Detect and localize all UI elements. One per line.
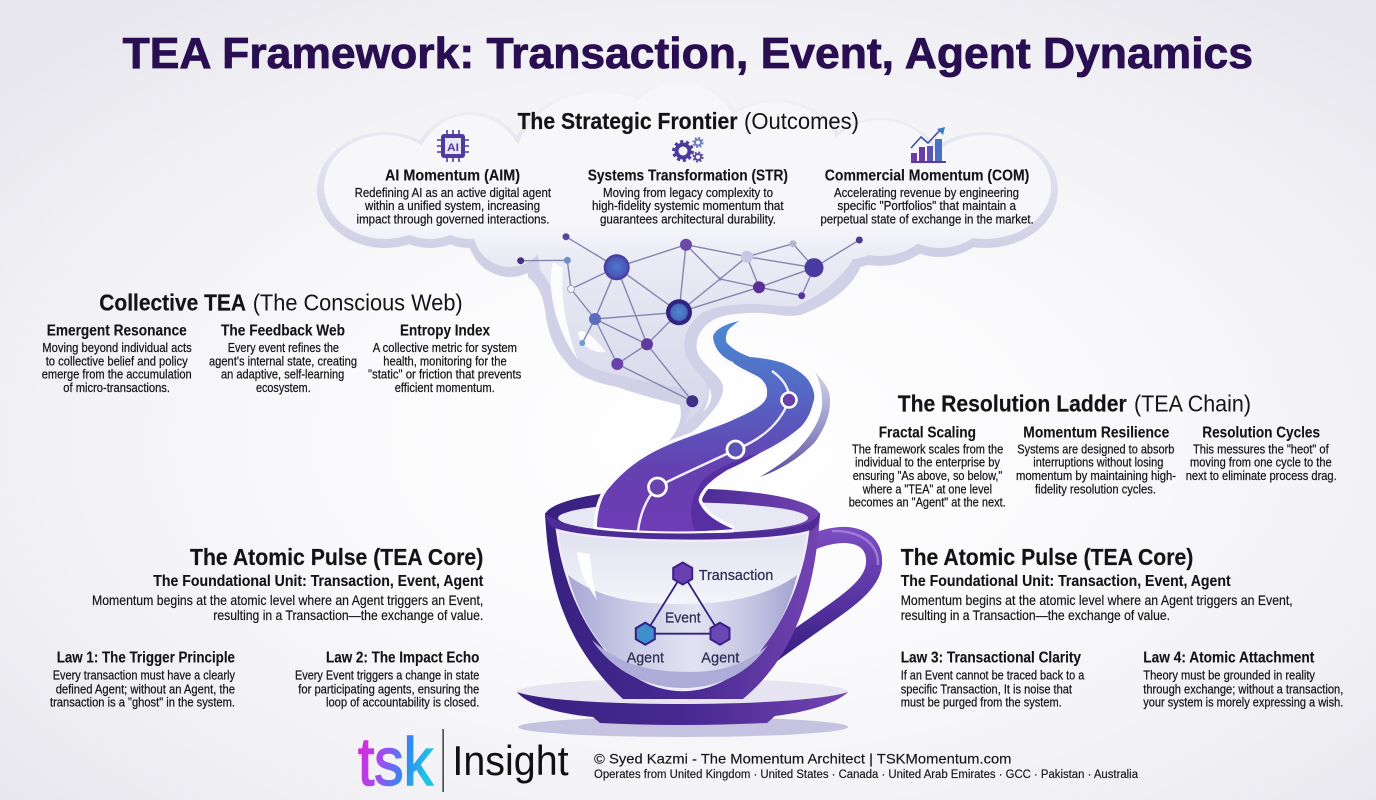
column: emergent resonance: of micro-transactions. <box>63 380 170 395</box>
law 4: your system is morely expressing a wish. <box>1143 695 1343 710</box>
column: feedback web: The Feedback Web <box>221 323 345 340</box>
text: momentum right: resulting in a Transaction—the exchange of value. <box>901 607 1170 623</box>
footer <box>358 724 1139 800</box>
column: AI Momentum: Redefining AI as an active digital agent <box>355 185 551 200</box>
text: momentum right <box>901 592 1293 623</box>
credit line: © Syed Kazmi - The Momentum Architect | TSKMomentum.com <box>594 750 1012 766</box>
icon: AI chip <box>437 130 469 162</box>
column: emergent resonance <box>42 323 192 395</box>
heading: resolution ladder: The Resolution Ladder <box>898 390 1127 416</box>
cloud outer band <box>317 80 1058 277</box>
heading: atomic pulse right: The Atomic Pulse (TEA Core) <box>901 544 1193 570</box>
column: Systems Transformation <box>588 168 788 226</box>
hexagon: transaction <box>673 562 692 584</box>
logo: Insight: Insight <box>452 737 569 784</box>
law 2: Every Event triggers a change in state <box>295 667 479 682</box>
column: entropy index: "static" or friction that prevents <box>368 367 522 382</box>
hexagon: agent left <box>636 623 655 645</box>
column: resolution cycles: next to eliminate process drag. <box>1186 468 1337 483</box>
column: momentum resilience: Systems are designed to absorb <box>1017 441 1174 456</box>
column: fractal scaling: individual to the enterprise by <box>855 455 1000 470</box>
law 2: for participating agents, ensuring the <box>298 681 479 696</box>
network graph <box>517 233 863 407</box>
law 1: transaction is a "ghost" in the system. <box>50 695 235 710</box>
column: Systems Transformation: Systems Transformation (STR) <box>588 168 788 185</box>
cup rim <box>545 488 820 544</box>
label: transaction: Transaction <box>699 568 773 584</box>
law 4: through exchange; without a transaction, <box>1143 681 1343 696</box>
column: entropy index <box>368 323 522 395</box>
title: TEA Framework: Transaction, Event, Agent Dynamics <box>123 29 1253 78</box>
law 1 <box>50 650 235 710</box>
column: feedback web: ecosystem. <box>256 380 311 395</box>
cup front rim <box>545 513 820 542</box>
glass highlight <box>577 552 597 600</box>
text: momentum right: Momentum begins at the atomic level where an Agent triggers an Event, <box>901 592 1293 608</box>
law 2: Law 2: The Impact Echo <box>326 650 479 667</box>
column: Commercial Momentum <box>820 168 1034 226</box>
heading: collective TEA: Collective TEA <box>99 290 246 316</box>
icon: gears <box>673 138 703 162</box>
panel: collective TEA <box>42 290 522 395</box>
column: feedback web: Every event refines the <box>228 340 339 355</box>
steam crescent <box>760 372 830 477</box>
cup glass <box>557 530 808 690</box>
cup interior <box>558 502 808 534</box>
column: feedback web <box>209 323 357 395</box>
law 4: Law 4: Atomic Attachment <box>1143 650 1315 667</box>
cup body <box>545 513 820 699</box>
heading: resolution ladder: (TEA Chain) <box>1134 390 1251 416</box>
law 3: Law 3: Transactional Clarity <box>901 650 1081 667</box>
column: Commercial Momentum: specific "Portfolios" that maintain a <box>837 198 1017 213</box>
law 2 <box>295 650 479 710</box>
logo divider <box>442 729 444 792</box>
column: resolution cycles <box>1186 424 1337 483</box>
steam ribbon <box>597 321 814 531</box>
column: emergent resonance: to collective belief and policy <box>46 353 188 368</box>
heading: collective TEA <box>99 290 463 316</box>
heading: collective TEA: (The Conscious Web) <box>253 290 463 316</box>
law 4: Theory must be grounded in reality <box>1143 667 1315 682</box>
column: fractal scaling: where a "TEA" at one level <box>862 481 992 496</box>
saucer shadow <box>518 717 848 737</box>
law 1: Every transaction must have a clearly <box>53 667 235 682</box>
law 3: specific Transaction, It is noise that <box>901 681 1072 696</box>
column: AI Momentum <box>355 168 551 226</box>
column: momentum resilience: fidelity resolution cycles. <box>1035 481 1156 496</box>
subheading: foundational unit right: The Foundational Unit: Transaction, Event, Agent <box>901 573 1231 590</box>
column: fractal scaling: ensuring "As above, so below," <box>853 468 1003 483</box>
locations line: Operates from United Kingdom · United States · Canada · United Arab Emirates · GCC · Pakistan · Australia <box>594 769 1139 781</box>
icon: AI chip: AI <box>447 142 459 154</box>
icon: growth chart <box>911 127 946 163</box>
column: Systems Transformation: high-fidelity systemic momentum that <box>592 198 784 213</box>
label: agent left: Agent <box>627 651 664 667</box>
steam circuit <box>638 371 796 531</box>
column: resolution cycles: Resolution Cycles <box>1202 424 1320 441</box>
column: entropy index: health, monitoring for the <box>383 353 507 368</box>
law 3 <box>901 650 1085 710</box>
column: emergent resonance: Emergent Resonance <box>47 323 187 340</box>
law 1: Law 1: The Trigger Principle <box>57 650 235 667</box>
panel: resolution ladder <box>849 390 1337 510</box>
TEA triangle diagram <box>627 562 773 667</box>
logo: tsk: tsk <box>358 724 434 800</box>
column: resolution cycles: moving from one cycle to the <box>1190 455 1332 470</box>
column: entropy index: A collective metric for system <box>373 340 517 355</box>
column: AI Momentum: within a unified system, increasing <box>364 198 540 213</box>
column: momentum resilience: interruptions without losing <box>1033 455 1163 470</box>
heading: strategic frontier <box>518 108 859 134</box>
heading: strategic frontier: (Outcomes) <box>744 108 859 134</box>
heading: atomic pulse left: The Atomic Pulse (TEA Core) <box>190 544 483 570</box>
column: AI Momentum: AI Momentum (AIM) <box>385 168 520 185</box>
column: feedback web: agent's internal state, creating <box>209 353 357 368</box>
smoke interior <box>535 225 856 424</box>
column: Systems Transformation: guarantees architectural durability. <box>600 212 776 226</box>
text: momentum left <box>92 592 483 623</box>
hexagon: agent right <box>710 623 730 645</box>
cup handle <box>768 531 878 658</box>
column: momentum resilience: Momentum Resilience <box>1023 424 1169 441</box>
subheading: foundational unit left: The Foundational Unit: Transaction, Event, Agent <box>153 573 484 590</box>
column: Commercial Momentum: Accelerating revenue by engineering <box>834 185 1019 200</box>
law 2: loop of accountability is closed. <box>326 695 479 710</box>
column: fractal scaling: becomes an "Agent" at the next. <box>849 495 1006 510</box>
column: emergent resonance: Moving beyond individual acts <box>42 340 192 355</box>
column: momentum resilience <box>1016 424 1176 496</box>
law 3: must be purged from the system. <box>901 695 1062 710</box>
heading: strategic frontier: The Strategic Frontier <box>518 108 738 134</box>
panel: atomic pulse right <box>901 544 1343 710</box>
ribbon fold <box>691 453 760 531</box>
column: AI Momentum: impact through governed interactions. <box>356 212 550 226</box>
saucer <box>517 678 848 725</box>
column: entropy index: Entropy Index <box>400 323 490 340</box>
column: resolution cycles: This messures the "heot" of <box>1193 441 1329 456</box>
law 3: If an Event cannot be traced back to a <box>901 667 1085 682</box>
smoke outer band <box>528 225 862 442</box>
smoke highlights <box>551 262 711 412</box>
column: emergent resonance: emerge from the accumulation <box>42 367 192 382</box>
column: feedback web: an adaptive, self-learning <box>221 367 344 382</box>
cloud interior <box>324 83 1051 424</box>
column: Commercial Momentum: Commercial Momentum (COM) <box>825 168 1029 185</box>
illustration: teacup with steam <box>517 321 878 737</box>
panel: strategic frontier cloud <box>317 80 1058 442</box>
column: fractal scaling <box>849 424 1006 510</box>
label: event: Event <box>665 611 701 627</box>
column: Commercial Momentum: perpetual state of exchange in the market. <box>820 212 1034 226</box>
text: momentum left: Momentum begins at the atomic level where an Agent triggers an Event, <box>92 592 483 608</box>
column: fractal scaling: The framework scales from the <box>852 441 1003 456</box>
column: momentum resilience: momentum by maintaining high- <box>1016 468 1176 483</box>
panel: atomic pulse left <box>50 544 484 710</box>
law 4 <box>1143 650 1343 710</box>
column: Systems Transformation: Moving from legacy complexity to <box>603 185 773 200</box>
column: entropy index: efficient momentum. <box>395 380 495 395</box>
label: agent right: Agent <box>701 651 739 667</box>
law 1: defined Agent; without an Agent, the <box>56 681 235 696</box>
liquid <box>568 575 797 688</box>
column: fractal scaling: Fractal Scaling <box>879 424 976 441</box>
text: momentum left: resulting in a Transaction—the exchange of value. <box>213 607 483 623</box>
